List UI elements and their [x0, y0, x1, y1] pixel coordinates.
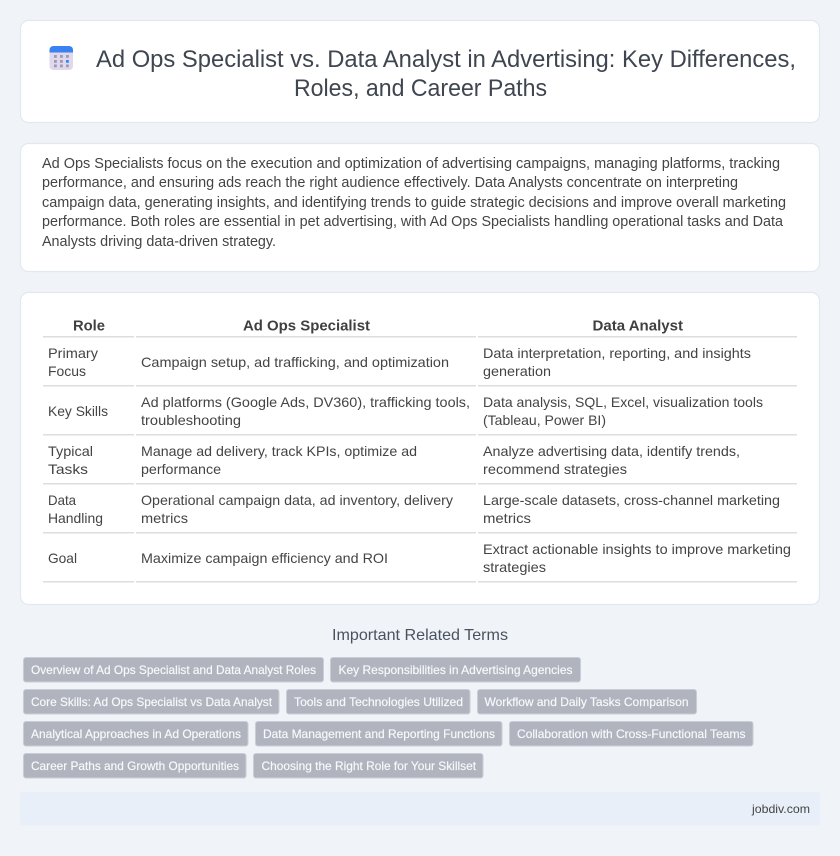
- panel: header: [20, 20, 820, 122]
- tag group: related term links: Analytical Approaches in Ad Operations: [31, 727, 241, 741]
- text block: introduction paragraph: [42, 156, 786, 250]
- text block: introduction paragraph: Ad Ops Specialists focus on the execution and optimization of advertising campaigns, managing platforms, tracking: [42, 156, 780, 172]
- table row: goal: [43, 541, 797, 582]
- panel: comparison table: [20, 292, 820, 604]
- table row: key skills: [43, 394, 797, 436]
- tag group: related term links: Choosing the Right Role for Your Skillset: [262, 759, 477, 773]
- table row: data handling: metrics: [483, 510, 531, 526]
- table row: key skills: Data analysis, SQL, Excel, visualization tools: [483, 394, 763, 410]
- table header row: [43, 318, 797, 338]
- tag group: related term links: Overview of Ad Ops Specialist and Data Analyst Roles: [31, 663, 316, 677]
- text block: introduction paragraph: performance, and ensuring ads reach the right audience effectively. Data Analysts concentrate on interpreting: [42, 175, 738, 191]
- table row: primary focus: Primary: [48, 345, 98, 361]
- text block: introduction paragraph: performance. Both roles are essential in pet advertising, with Ad Ops Specialists handling operational tasks and Data: [42, 214, 783, 230]
- tag group: related term links: Collaboration with Cross-Functional Teams: [517, 727, 746, 741]
- table row: goal: strategies: [483, 559, 546, 575]
- table row: primary focus: generation: [483, 363, 551, 379]
- table row: goal: Maximize campaign efficiency and ROI: [141, 550, 388, 566]
- tag group: related term links: [24, 658, 753, 778]
- table row: data handling: Large-scale datasets, cross-channel marketing: [483, 492, 780, 508]
- tag group: related term links: Workflow and Daily Tasks Comparison: [484, 695, 688, 709]
- table row: primary focus: Campaign setup, ad trafficking, and optimization: [141, 354, 449, 370]
- table row: typical tasks: Tasks: [48, 461, 88, 477]
- panel: introduction: [20, 144, 820, 272]
- heading: important related terms: Important Related Terms: [332, 627, 508, 644]
- table row: data handling: Operational campaign data, ad inventory, delivery: [141, 492, 453, 508]
- tag group: related term links: Key Responsibilities in Advertising Agencies: [338, 663, 572, 677]
- table row: key skills: Key Skills: [48, 403, 108, 419]
- table row: typical tasks: Analyze advertising data, identify trends,: [483, 443, 740, 459]
- text block: introduction paragraph: campaign data, generating insights, and identifying trends to guide strategic decisions and improve overall marketing: [42, 195, 786, 211]
- table row: data handling: Data: [48, 492, 76, 508]
- tag group: related term links: Core Skills: Ad Ops Specialist vs Data Analyst: [31, 695, 273, 709]
- title: Ad Ops Specialist vs. Data Analyst in Advertising: Key Differences,: [96, 46, 796, 73]
- table row: goal: Extract actionable insights to improve marketing: [483, 541, 791, 557]
- table row: data handling: Handling: [48, 510, 103, 526]
- title: Roles, and Career Paths: [294, 75, 547, 102]
- table row: primary focus: [43, 345, 797, 386]
- table row: data handling: metrics: [141, 510, 188, 526]
- table row: primary focus: Focus: [48, 363, 86, 379]
- tag group: related term links: Tools and Technologies Utilized: [294, 695, 463, 709]
- table row: key skills: troubleshooting: [141, 412, 241, 428]
- table header row: Role: [73, 318, 105, 334]
- table header row: Ad Ops Specialist: [243, 318, 370, 334]
- footer source text: jobdiv.com: [751, 802, 810, 816]
- table row: key skills: Ad platforms (Google Ads, DV360), trafficking tools,: [141, 394, 470, 410]
- icon: calendar: [50, 46, 73, 70]
- table row: typical tasks: performance: [141, 461, 221, 477]
- table row: primary focus: Data interpretation, reporting, and insights: [483, 345, 751, 361]
- tag group: related term links: Career Paths and Growth Opportunities: [31, 759, 239, 773]
- table row: typical tasks: Manage ad delivery, track KPIs, optimize ad: [141, 443, 417, 459]
- footer: [20, 792, 820, 826]
- title: [96, 46, 796, 102]
- tag group: related term links: Data Management and Reporting Functions: [263, 727, 495, 741]
- table row: data handling: [43, 492, 797, 534]
- table row: key skills: (Tableau, Power BI): [483, 412, 606, 428]
- section: important related terms: [24, 627, 753, 778]
- table row: typical tasks: recommend strategies: [483, 461, 627, 477]
- text block: introduction paragraph: Analysts driving data-driven strategy.: [42, 234, 276, 250]
- table row: typical tasks: Typical: [48, 443, 93, 459]
- table row: typical tasks: [43, 443, 797, 484]
- table row: goal: Goal: [48, 550, 77, 566]
- table header row: Data Analyst: [592, 318, 683, 334]
